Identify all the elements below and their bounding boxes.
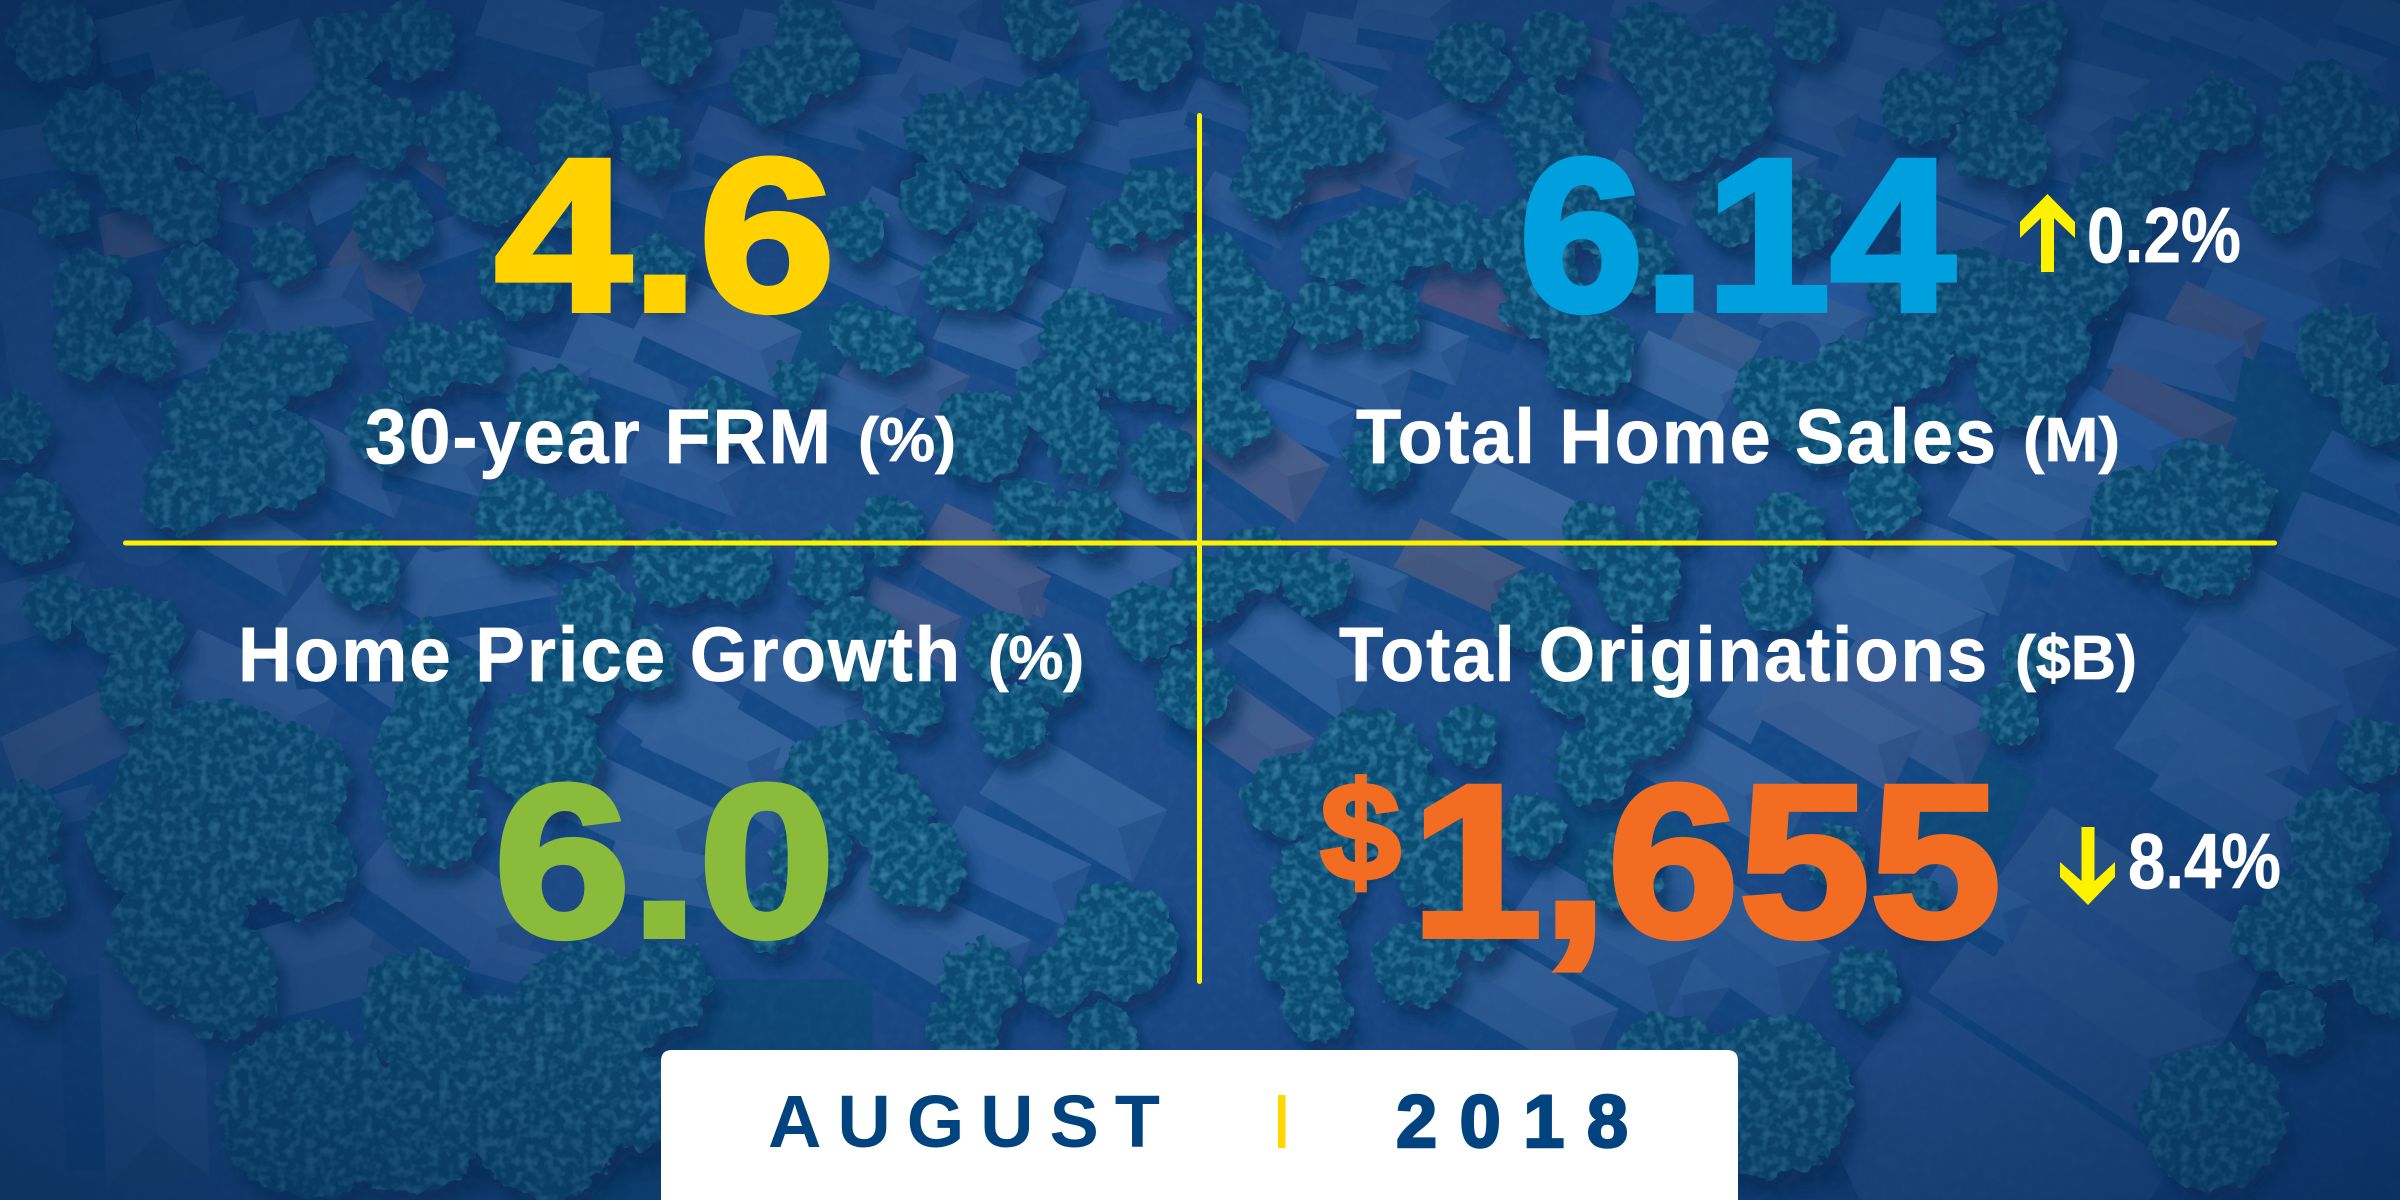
label: Total Home Sales (M): Total Home Sales bbox=[1356, 394, 1998, 480]
label: Home Price Growth (%): Home Price Growth bbox=[238, 612, 962, 698]
panel: Total Home Sales bbox=[1356, 114, 2241, 480]
panel: Total Originations bbox=[1320, 612, 2281, 982]
label: Total Home Sales (M): (M) bbox=[2023, 406, 2120, 475]
month: AUGUST: AUGUST bbox=[768, 1080, 1160, 1163]
label: 30-year FRM (%): 30-year FRM bbox=[365, 394, 833, 480]
label: Total Originations ($B): ($B) bbox=[2015, 624, 2137, 693]
label: Total Originations ($B): Total Originations bbox=[1339, 612, 1989, 698]
value 6.0: 6.0 bbox=[494, 740, 835, 982]
icon: up arrow bbox=[2020, 194, 2075, 272]
date banner bbox=[661, 1050, 1738, 1200]
value 6.14: 6.14 bbox=[1519, 114, 1955, 356]
panel: 30-year FRM bbox=[365, 114, 956, 480]
panel: Home Price Growth bbox=[238, 612, 1084, 982]
value $1,655: $ bbox=[1320, 753, 1401, 910]
icon: down arrow bbox=[2060, 827, 2115, 905]
road bbox=[0, 253, 1791, 612]
value $1,655: 1,655 bbox=[1411, 740, 2001, 982]
label: Home Price Growth (%): (%) bbox=[988, 624, 1084, 693]
change: 0.2%: 0.2% bbox=[2087, 191, 2241, 279]
year: 2018: 2018 bbox=[1396, 1080, 1628, 1163]
value 4.6: 4.6 bbox=[495, 114, 835, 356]
vertical divider line bbox=[1197, 113, 1202, 984]
label: 30-year FRM (%): (%) bbox=[858, 406, 956, 475]
change: 8.4%: 8.4% bbox=[2128, 817, 2281, 905]
horizontal divider line bbox=[123, 540, 2277, 546]
divider bar bbox=[1278, 1095, 1286, 1148]
